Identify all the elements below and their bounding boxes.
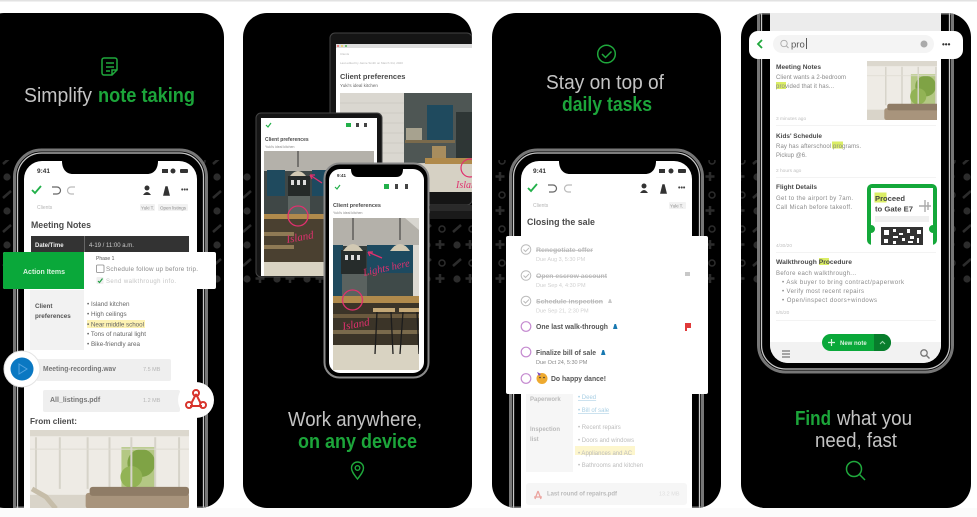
client preferences table: Client (35, 303, 53, 310)
faded note table: list (530, 437, 539, 443)
breadcrumb (533, 202, 686, 209)
phone mockup: Yuki's ideal kitchen (333, 211, 363, 215)
note: flight details: Flight Details (776, 184, 817, 191)
heading: work anywhere: on any device (298, 431, 417, 453)
attachment: repairs pdf: Last round of repairs.pdf (547, 492, 618, 498)
phone mockup: 9:41 (337, 173, 347, 178)
note title: Closing the sale (527, 217, 595, 228)
status bar (533, 168, 686, 174)
toolbar icons: ••• (181, 187, 189, 194)
note: walkthrough procedure: • Open/inspect doors+windows (782, 298, 877, 304)
icon: note (102, 58, 117, 75)
note: flight details: Get to the airport by 7am. (776, 196, 853, 202)
faded note table: • Appliances and AC (578, 451, 633, 457)
faded note table: • Deed (578, 395, 596, 401)
client preferences table: • Tons of natural light (87, 331, 146, 338)
heading: simplify note taking: note taking (98, 85, 195, 107)
client preferences table: • Island kitchen (87, 301, 130, 308)
note: meeting notes (776, 61, 961, 126)
heading: find what you need: need, fast (815, 430, 897, 452)
completed tasks (521, 245, 690, 314)
status bar: 9:41 (37, 168, 50, 175)
breadcrumb: Clients (533, 203, 549, 209)
search bar: ••• (942, 40, 951, 49)
faded note table: • Recent repairs (578, 425, 621, 431)
icon: check circle (598, 45, 615, 63)
laptop kitchen photo (340, 93, 479, 192)
laptop mockup: Last edited by Jamie Smith on March 3rd, 2020 (340, 61, 403, 65)
heading: simplify note taking: Simplify (24, 85, 92, 107)
note: walkthrough procedure: • Verify most recent repairs (782, 289, 864, 295)
heading: daily tasks: daily tasks (562, 94, 652, 116)
attachment: repairs pdf: 13.2 MB (659, 492, 680, 498)
phone kitchen photo (333, 218, 419, 372)
breadcrumb: Yuki T. (670, 204, 683, 208)
breadcrumb and tags (37, 204, 188, 211)
faded note table (526, 394, 643, 472)
phone mockup (14, 150, 206, 509)
heading: find what you need (795, 408, 912, 452)
tablet mockup (256, 113, 382, 277)
attachment: pdf file: All_listings.pdf (50, 397, 101, 404)
phone kitchen photo: Lights here (361, 258, 411, 279)
completed tasks: Open escrow account (536, 273, 608, 280)
open tasks (521, 322, 691, 384)
heading: daily tasks (546, 72, 664, 116)
note: walkthrough procedure: Walkthrough Procedure (776, 259, 852, 266)
tablet mockup: Client preferences (265, 137, 309, 143)
faded note table: Paperwork (530, 397, 561, 403)
tablet mockup: Yuki's ideal kitchen (265, 145, 295, 149)
panel: simplify note taking (0, 13, 224, 509)
completed tasks: Renegotiate offer (536, 247, 593, 254)
attachment: audio file: 7.5 MB (143, 367, 161, 373)
attachment: repairs pdf (526, 483, 687, 505)
icon: pdf badge (178, 382, 214, 418)
client preferences table: • High ceilings (87, 311, 127, 318)
action items callout: Schedule follow up before trip. (106, 266, 198, 273)
action items callout (3, 252, 216, 289)
note: kids schedule: Kids' Schedule (776, 133, 822, 140)
note: kids schedule (776, 133, 936, 178)
completed tasks: Schedule inspection (536, 298, 603, 306)
heading: work anywhere: Work anywhere, (288, 409, 422, 431)
status bar (37, 168, 188, 174)
table header: 4-19 / 11:00 a.m. (89, 243, 134, 249)
laptop kitchen photo: Islan (455, 180, 476, 191)
client preferences table (30, 290, 146, 350)
attachment: audio file (36, 359, 171, 381)
heading: find what you need: what you (836, 408, 912, 430)
toolbar icons: ••• (678, 185, 686, 192)
note: flight details: 4/30/20 (776, 243, 792, 249)
heading: from client: From client: (30, 416, 77, 426)
open tasks: Do happy dance! (551, 376, 606, 383)
note: meeting notes: Meeting Notes (776, 64, 821, 71)
completed tasks: Due Sep 4, 4:30 PM (536, 283, 586, 289)
toolbar icons (528, 184, 686, 193)
toolbar icons (32, 186, 189, 195)
living room photo (30, 430, 189, 508)
laptop mockup: Yuki's ideal kitchen (340, 83, 378, 88)
note: walkthrough procedure (776, 258, 936, 321)
note: kids schedule: 2 hours ago (776, 168, 802, 174)
note: walkthrough procedure: Before each walkthrough... (776, 271, 856, 277)
phone mockup (510, 150, 702, 508)
phone mockup (758, 13, 961, 372)
attachment: pdf file (43, 390, 180, 412)
tablet kitchen photo: Island (284, 229, 315, 246)
note: kids schedule: Pickup @6. (776, 153, 807, 159)
panel: find what you need (741, 13, 971, 508)
action items callout: Action Items (23, 269, 65, 276)
phone kitchen photo: Island (340, 316, 371, 333)
note: meeting notes: provided that it has... (776, 84, 834, 90)
note: kids schedule: Ray has afterschool programs. (776, 144, 861, 150)
completed tasks: Due Sep 21, 2:30 PM (536, 308, 589, 314)
client preferences table: • Near middle school (87, 322, 144, 328)
heading: find what you need: Find (795, 408, 831, 430)
action items callout: Send walkthrough info. (106, 279, 176, 285)
open tasks: Due Oct 24, 5:30 PM (536, 360, 588, 366)
note: meeting notes: Client wants a 2-bedroom (776, 75, 846, 81)
laptop mockup (330, 33, 479, 219)
boarding pass: to Gate E7 (875, 204, 913, 214)
faded note table: Inspection (530, 427, 560, 433)
breadcrumb and tags: Yuki T. (141, 206, 154, 210)
heading: simplify note taking (24, 87, 194, 106)
icon: location pin (352, 462, 364, 479)
boarding pass (867, 184, 937, 245)
icon: play button (4, 351, 40, 387)
action items callout: Phase 1 (96, 256, 115, 262)
heading: work anywhere (288, 409, 422, 453)
panel: daily tasks (492, 13, 721, 508)
icon: magnifier (846, 462, 865, 480)
faded note table: • Bill of sale (578, 408, 610, 414)
completed tasks: Due Aug 3, 5:30 PM (536, 257, 586, 263)
note title: Meeting Notes (31, 220, 91, 231)
note: walkthrough procedure: 5/5/20 (776, 310, 790, 316)
new note button: New note (840, 341, 867, 347)
heading: daily tasks: Stay on top of (546, 72, 664, 94)
note: flight details: Call Micah before takeoff. (776, 205, 852, 211)
open tasks: Finalize bill of sale (536, 350, 596, 357)
phone mockup (324, 164, 428, 378)
table header (31, 236, 189, 252)
client preferences table: • Bike-friendly area (87, 341, 140, 348)
icon: party face (536, 372, 548, 384)
table header: Date/Time (35, 243, 64, 249)
breadcrumb and tags: Open listings (160, 206, 187, 210)
attachment: audio file: Meeting-recording.wav (43, 366, 116, 373)
search bar (749, 31, 963, 59)
bottom toolbar (770, 342, 941, 363)
faded note table: • Doors and windows (578, 438, 634, 444)
panel: work anywhere (243, 13, 479, 508)
laptop mockup: Clients (340, 52, 350, 56)
note: flight details (776, 184, 937, 253)
faded note table: • Bathrooms and kitchen (578, 463, 643, 469)
tasks popup (506, 236, 708, 394)
note: walkthrough procedure: • Ask buyer to bring contract/paperwork (782, 280, 905, 286)
client preferences table: preferences (35, 313, 71, 320)
phone mockup: Client preferences (333, 203, 381, 209)
search bar: pro (791, 40, 805, 50)
laptop mockup: Client preferences (340, 72, 405, 81)
boarding pass: Proceed (875, 194, 905, 203)
tablet kitchen photo (264, 151, 374, 276)
open tasks: One last walk-through (536, 324, 608, 331)
breadcrumb and tags: Clients (37, 205, 53, 211)
attachment: pdf file: 1.2 MB (143, 398, 161, 404)
note: meeting notes: 3 minutes ago (776, 116, 806, 122)
new note button (822, 334, 891, 351)
status bar: 9:41 (533, 168, 546, 175)
